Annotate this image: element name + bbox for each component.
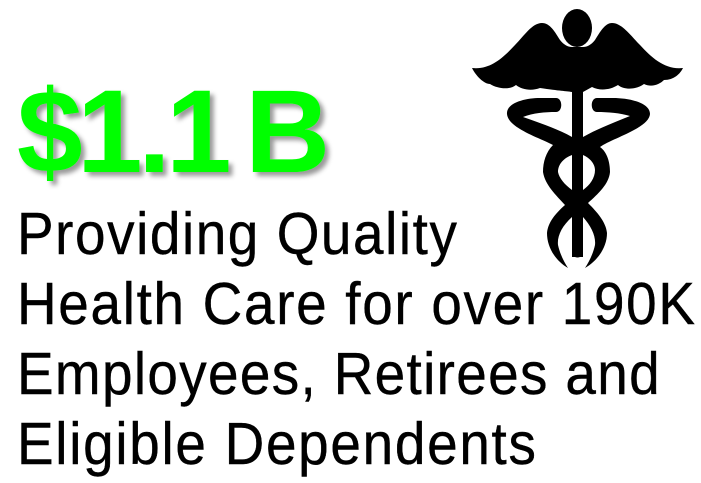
- icon part: staff: [572, 88, 583, 257]
- icon part: head: [562, 9, 592, 47]
- icon part: right tail: [576, 198, 607, 268]
- icon part: left tail: [547, 198, 578, 268]
- icon: caduceus: [472, 9, 683, 268]
- line 1: Providing Quality: [17, 201, 457, 267]
- body text: [17, 201, 695, 477]
- line 2: Health Care for over 190K: [17, 271, 695, 337]
- icon part: left upper serpent curl: [507, 98, 578, 150]
- headline figure: $1.1 B: $1.1 B: [17, 66, 330, 198]
- line 3: Employees, Retirees and: [17, 341, 660, 407]
- icon part: serpent loop: [543, 145, 610, 205]
- icon part: right upper serpent curl: [577, 98, 650, 150]
- icon part: wings: [472, 23, 683, 92]
- line 4: Eligible Dependents: [17, 411, 536, 477]
